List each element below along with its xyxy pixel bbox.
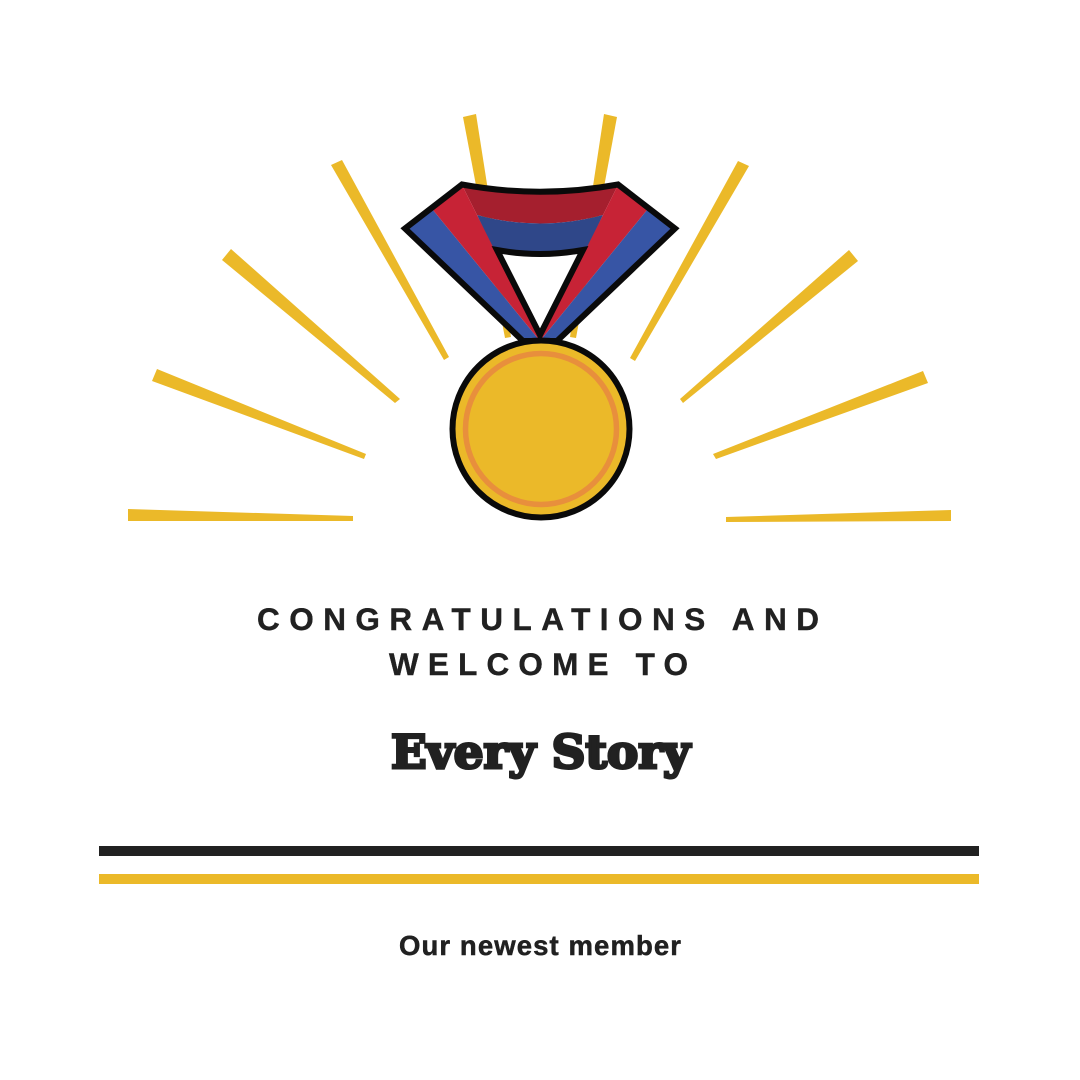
heading: congratulations: WELCOME TO xyxy=(389,646,688,682)
ribbon back band: dark red xyxy=(462,185,618,224)
sun rays behind medal xyxy=(128,114,951,522)
medal disc xyxy=(452,340,630,518)
medal inner ring xyxy=(466,354,616,504)
ribbon inner triangle xyxy=(497,250,583,335)
caption: our newest member: Our newest member xyxy=(399,930,681,961)
ribbon left blue strap xyxy=(406,210,540,341)
heading: congratulations: CONGRATULATIONS AND xyxy=(257,601,819,637)
ribbon outline xyxy=(405,184,675,341)
ribbon right red strap xyxy=(540,185,647,341)
divider: yellow bar xyxy=(99,874,979,884)
medal ribbon xyxy=(405,184,675,341)
ribbon back band: dark blue xyxy=(477,215,603,253)
ribbon right blue strap xyxy=(540,210,674,341)
title: Every Story: Every Story xyxy=(391,725,691,779)
divider: black bar xyxy=(99,846,979,856)
ribbon left red strap xyxy=(433,185,540,341)
heading: congratulations xyxy=(257,601,819,682)
